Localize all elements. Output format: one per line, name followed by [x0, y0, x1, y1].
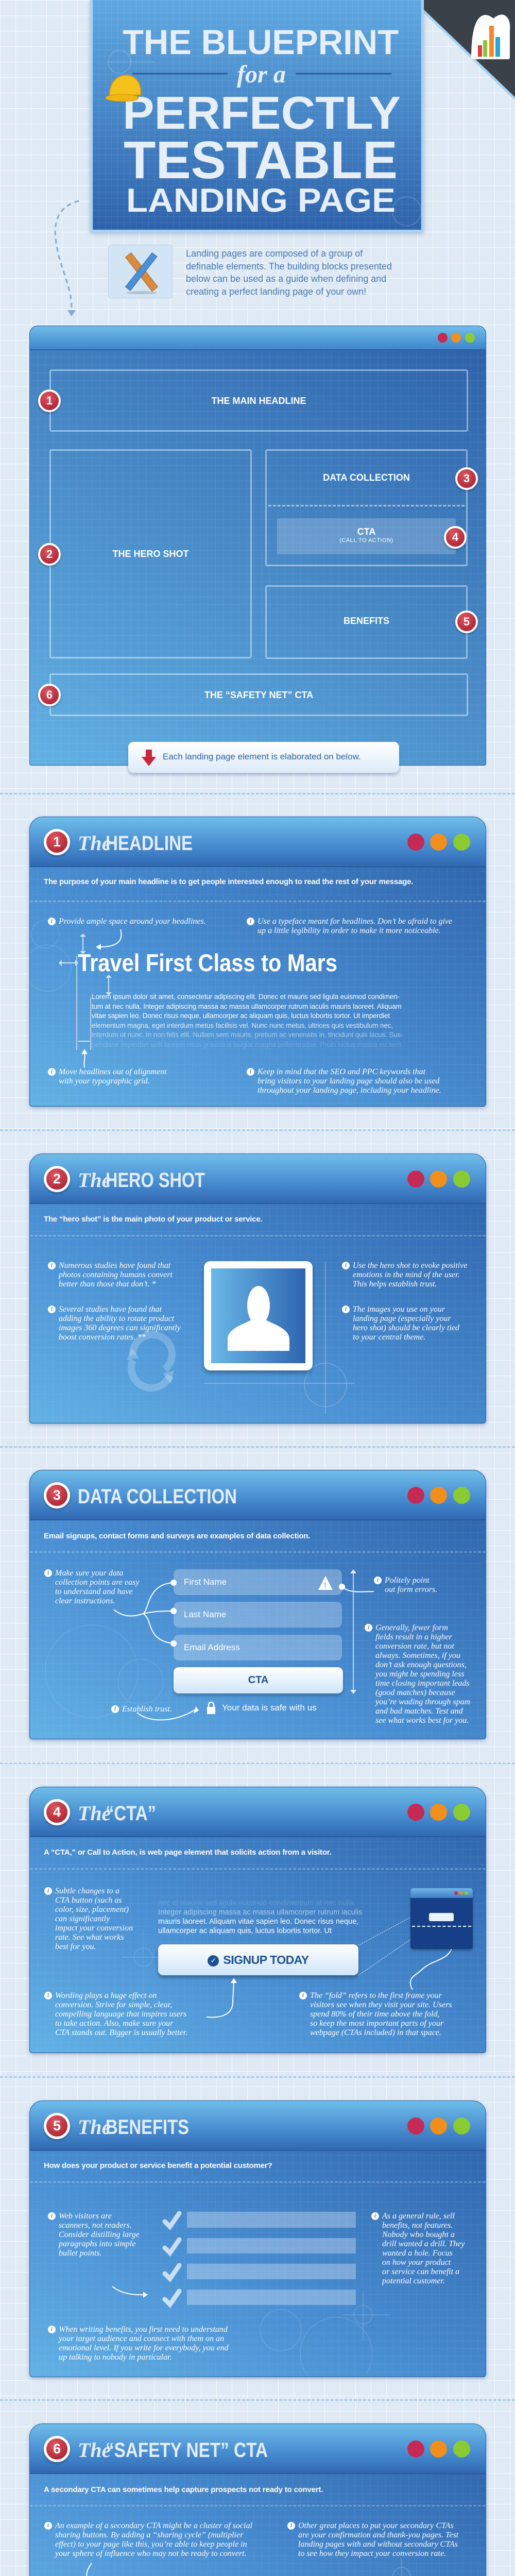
lorem above CTA: nec et mauris sed ligula euismod condimentum at nec nulla. [158, 1899, 356, 1907]
tip: alignment: with your typographic grid. [59, 1077, 150, 1086]
tip: easy to understand: to understand and have [55, 1587, 133, 1596]
button: signup today [158, 1944, 358, 1975]
tip: typeface: up a little legibility in order to make it more noticeable. [258, 926, 441, 935]
connectors [45, 1569, 374, 1721]
tip: positive emotions: emotions in the mind of the user. [353, 1270, 460, 1279]
form fields: First Name [184, 1577, 227, 1587]
header: CTA: The [78, 1802, 111, 1825]
intro text: The “hero shot” is the main photo of your product or service. [44, 1215, 263, 1224]
tip: keywords: bring visitors to your landing page should also be used [258, 1077, 439, 1086]
tip: rotate images: Several studies have found that [59, 1305, 162, 1314]
header: benefits: BENEFITS [106, 2116, 189, 2139]
tip: the fold [299, 1991, 452, 2037]
tip: benefits not features: or service can benefit a [382, 2267, 459, 2276]
guides and arrows [123, 1917, 452, 2018]
lorem body text: tum at nec nulla. Integer adipiscing massa ac massa ullamcorper rutrum iaculis mauris laoreet. Aliquam [92, 1003, 401, 1010]
intro text: below can be used as a guide when defining and [186, 274, 386, 284]
blueprint browser overview [29, 326, 486, 766]
header: headline: HEADLINE [106, 832, 193, 855]
tip: alignment: Move headlines out of alignment [59, 1067, 167, 1076]
header: hero shot: HERO SHOT [106, 1169, 205, 1192]
header: hero shot: The [78, 1168, 111, 1192]
icon: hard hat [105, 75, 141, 102]
tip: audience: your target audience and connect with them on an [59, 2334, 224, 2343]
lorem above CTA: ullamcorper ac aliquam quis, luctus lobortis tortor. Ut [158, 1927, 332, 1935]
tip: alignment: i [51, 1069, 53, 1075]
tip: wording [44, 1991, 187, 2037]
tip: easy to understand: clear instructions. [55, 1597, 115, 1605]
tip: humans convert: better than those that don’t. * [59, 1280, 156, 1289]
icon: pencil and ruler [108, 245, 173, 298]
tip: benefits not features: wanted a hole. Focus [382, 2249, 453, 2258]
tip: social cluster: effect) to your page like this, you’re able to keep people in [55, 2540, 247, 2549]
tip: wording: CTA stands out. Bigger is usually better. [55, 2028, 187, 2037]
tip: positive emotions: Use the hero shot to evoke positive [353, 1261, 467, 1270]
intro text: creating a perfect landing page of your own! [186, 286, 366, 297]
tip: fewer fields: and bad matches. Test and [375, 1707, 463, 1716]
tip: alignment [48, 1067, 167, 1086]
number badges: 2 [46, 548, 53, 561]
lorem above CTA: Integer adipiscing massa ac massa ullamcorper rutrum iaculis [158, 1908, 363, 1917]
tip: fewer fields: you’re wading through spam [375, 1698, 470, 1706]
box: data collection [265, 449, 468, 566]
tip: fewer fields: i [368, 1624, 369, 1631]
guides and rotate icon [127, 1262, 355, 1413]
hero frame with person [204, 1261, 313, 1370]
tip: keywords: Keep in mind that the SEO and PPC keywords that [258, 1067, 425, 1076]
header: headline: 1 [53, 834, 61, 850]
button: signup today: ✓ [211, 1957, 216, 1965]
header: CTA [30, 1787, 486, 1837]
tip: central theme: landing page (especially your [353, 1314, 451, 1323]
tip: establish trust: i [114, 1706, 116, 1712]
tip: keywords: i [250, 1069, 251, 1075]
tip: fewer fields: you might be spending less [375, 1670, 464, 1679]
form fields: Last Name [184, 1609, 226, 1619]
tip: easy to understand [44, 1569, 139, 1605]
button: signup today: SIGNUP TODAY [223, 1953, 309, 1967]
tip: scanners: i [51, 2213, 53, 2219]
intro text: The purpose of your main headline is to get people interested enough to read the rest of your message. [44, 877, 413, 886]
tip: typeface: Use a typeface meant for headlines. Don’t be afraid to give [258, 917, 452, 926]
guides and measure [30, 2558, 487, 2576]
tip: fewer fields: conversion rate, but not [375, 1642, 454, 1651]
tip: humans convert: photos containing humans convert [59, 1270, 173, 1279]
tip: benefits not features: As a general rule, sell [382, 2212, 455, 2221]
panel: 6 safety net CTA [29, 2424, 486, 2576]
header: benefits: 5 [53, 2118, 61, 2133]
tip: social cluster: i [47, 2522, 49, 2529]
tip: scanners: Web visitors are [59, 2212, 112, 2221]
tip: benefits not features: drill wanted a drill. They [382, 2240, 465, 2248]
header: safety net: The [78, 2438, 111, 2462]
tip: central theme: to your central theme. [353, 1333, 425, 1342]
tip: benefits not features [371, 2212, 465, 2285]
tip: form errors: out form errors. [385, 1585, 437, 1594]
tip: thank-you pages [287, 2521, 458, 2558]
tip: benefits not features: on how your product [382, 2258, 451, 2267]
lorem body text: vitae sapien leo. Donec risus neque, ullamcorper ac aliquam quis, luctus lobortis tortor. Ut imperdiet [92, 1012, 390, 1020]
tip: fewer fields: Generally, fewer form [375, 1623, 448, 1632]
lock note [207, 1701, 317, 1714]
tip: form errors: i [377, 1577, 379, 1583]
tip: easy to understand: collection points are easy [55, 1578, 139, 1587]
box: data collection: CTA [357, 527, 375, 537]
tip: rotate images: i [51, 1306, 53, 1312]
tip: establish trust: Establish trust. [122, 1705, 172, 1714]
tip: wording: compelling language that inspires users [55, 2010, 186, 2019]
tip: benefits not features: Nobody who bought a [382, 2230, 455, 2239]
box: benefits: BENEFITS [344, 616, 389, 626]
tip: typeface [247, 917, 452, 935]
tip: subtle changes: can significantly [55, 1914, 110, 1923]
box: benefits [265, 585, 468, 659]
header: data collection: DATA COLLECTION [78, 1485, 237, 1508]
tip: rotate images [48, 1305, 181, 1342]
title block: THE BLUEPRINT [123, 23, 399, 62]
tip: the fold: so keep the most important parts of your [310, 2019, 443, 2028]
lorem body text: Lorem ipsum dolor sit amet, consectetur adipiscing elit. Donec et mauris sed ligula euismod condimen- [92, 993, 400, 1001]
tip: subtle changes [44, 1887, 133, 1951]
tip: humans convert: Numerous studies have found that [59, 1261, 170, 1270]
tip: fewer fields: don’t ask enough questions, [375, 1660, 467, 1669]
tip: audience: When writing benefits, you first need to understand [59, 2325, 228, 2334]
tip: the fold: webpage (CTAs included) in that space. [310, 2028, 441, 2037]
number badges: 4 [452, 531, 458, 544]
header: data collection: 3 [53, 1487, 61, 1503]
tip: subtle changes: Subtle changes to a [55, 1887, 119, 1895]
icon: mini browser fold [410, 1888, 473, 1949]
tip: ample space: Provide ample space around your headlines. [59, 917, 206, 926]
tip: social cluster: sharing buttons. By adding a “sharing cycle” (multiplier [55, 2531, 243, 2539]
tip: rotate images: images 360 degrees can significantly [59, 1324, 181, 1332]
tip: keywords: throughout your landing page, including your headline. [258, 1086, 441, 1095]
callout: elaborated below [128, 742, 399, 773]
tip: central theme [342, 1305, 459, 1342]
tip: rotate images: adding the ability to rotate product [59, 1314, 174, 1323]
tip: benefits not features: potential customer. [382, 2277, 445, 2285]
lorem body text: pendisse imperdiet velit laoreet risus gravida a feugiat magna pellentesque. Proin luctus massa eu sem [92, 1041, 402, 1048]
panel: 2 hero shot [29, 1154, 486, 1423]
box: safety net [49, 673, 468, 716]
tip: subtle changes: rate. See what works [55, 1933, 124, 1942]
tip: typeface: i [250, 918, 251, 924]
box: main headline [49, 369, 468, 432]
tip: wording: conversion. Strive for simple, clear, [55, 2001, 172, 2009]
intro text: How does your product or service benefit a potential customer? [44, 2161, 272, 2170]
tip: central theme: hero shot) should be clearly tied [353, 1324, 459, 1332]
tip: thank-you pages: are your confirmation and thank-you pages. Test [298, 2531, 458, 2539]
tip: scanners [48, 2212, 140, 2258]
tip: positive emotions [342, 1261, 468, 1289]
intro text: definable elements. The building blocks presented [186, 261, 392, 271]
lock note: Your data is safe with us [222, 1703, 317, 1713]
tip: subtle changes: color, size, placement) [55, 1905, 129, 1914]
tip: form errors [374, 1576, 437, 1594]
panel: 5 benefits [29, 2100, 486, 2377]
tip: wording: Wording plays a huge effect on [55, 1991, 157, 2000]
diagram: headline guides: Travel First Class to Mars [78, 949, 337, 976]
lorem above CTA: mauris laoreet. Aliquam vitae sapien leo. Donec risus neque, [158, 1918, 358, 1926]
panel: 3 data collection [29, 1470, 486, 1739]
intro text: Landing pages are composed of a group of [186, 248, 363, 259]
header: safety net: 6 [53, 2441, 61, 2456]
lorem above CTA [158, 1899, 363, 1935]
connectors: ! [324, 1581, 327, 1590]
tip: fewer fields: always. Sometimes, if you [375, 1651, 460, 1660]
tip: scanners: scanners, not readers. [59, 2221, 132, 2230]
tip: central theme: i [345, 1306, 347, 1312]
tip: fewer fields: (good matches) because [375, 1688, 455, 1697]
number badges [37, 389, 479, 709]
tip: audience: emotional level. If you write for everybody, you end [59, 2344, 229, 2352]
box: data collection: DATA COLLECTION [323, 472, 410, 483]
tip: subtle changes: best for you. [55, 1942, 96, 1951]
title block: TESTABLE [124, 130, 398, 190]
header: hero shot: 2 [53, 1171, 61, 1187]
header: CTA: “CTA” [106, 1802, 156, 1825]
number badges: 1 [46, 394, 53, 407]
tip: social cluster: your sphere of influence who may not be ready to convert. [55, 2549, 247, 2558]
tip: fewer fields: time closing important leads [375, 1679, 470, 1688]
number badges: 3 [464, 472, 470, 485]
box: hero shot [49, 449, 252, 658]
number badges: 6 [46, 688, 53, 701]
box: hero shot: THE HERO SHOT [112, 549, 188, 559]
tip: audience [48, 2325, 229, 2362]
tip: audience: i [51, 2326, 53, 2332]
form fields: Email Address [184, 1642, 240, 1652]
tip: easy to understand: i [47, 1570, 49, 1576]
header: safety net [30, 2424, 486, 2474]
corner logo badge [424, 0, 515, 100]
box: data collection: (CALL TO ACTION) [339, 537, 393, 544]
tip: scanners: bullet points. [59, 2249, 102, 2258]
tip: central theme: The images you use on your [353, 1305, 445, 1314]
tip: wording: to take action. Also, make sure your [55, 2019, 173, 2028]
tip: wording: i [47, 1992, 49, 1998]
tip: subtle changes: i [47, 1888, 49, 1894]
lorem body text: interdum ut nunc. In non felis elit. Nullam sem mauris, pretium ac venenatis in, tincidunt quis lacus. Sus- [92, 1031, 403, 1039]
tip: social cluster [44, 2521, 252, 2558]
tip: scanners: paragraphs into simple [59, 2240, 135, 2248]
panel: 4 the CTA [29, 1787, 486, 2053]
lorem body text: elementum magna, eget interdum metus facilisis vel. Nunc nunc metus, ultrices quis vestibulum nec, [92, 1022, 393, 1029]
tip: benefits not features: i [374, 2213, 376, 2219]
tip: thank-you pages: to see how they impact your conversion rate. [298, 2549, 446, 2558]
tip: positive emotions: This helps establish trust. [353, 1280, 437, 1289]
arrow: dashed intro arrow [55, 200, 79, 316]
tip: scanners: Consider distilling large [59, 2230, 140, 2239]
check list [112, 2211, 390, 2374]
header: headline [30, 817, 486, 867]
tip: fewer fields: fields result in a higher [375, 1633, 452, 1641]
tip: easy to understand: Make sure your data [55, 1569, 123, 1578]
title block [90, 0, 424, 232]
tip: subtle changes: impact your conversion [55, 1924, 133, 1933]
tip: ample space: i [51, 918, 53, 924]
title block: LANDING PAGE [126, 181, 396, 219]
tip: the fold: i [302, 1992, 304, 1998]
tip: subtle changes: CTA button (such as [55, 1896, 122, 1905]
number badges: 5 [464, 615, 470, 628]
form fields: CTA [248, 1674, 268, 1686]
header: benefits: The [78, 2115, 111, 2139]
tip: social cluster: An example of a secondary CTA might be a cluster of social [55, 2521, 252, 2530]
header: hero shot [30, 1154, 486, 1204]
tip: the fold: The “fold” refers to the first frame your [310, 1991, 442, 2000]
diagram: headline guides [30, 920, 337, 1067]
tip: keywords [247, 1067, 441, 1095]
tip: fewer fields: see what works best for you. [375, 1716, 469, 1725]
tip: the fold: spend 80% of their time above the fold, [310, 2010, 440, 2019]
intro text: A “CTA,” or Call to Action, is web page element that solicits action from a visitor. [44, 1848, 332, 1857]
box: main headline: THE MAIN HEADLINE [211, 396, 306, 406]
tip: rotate images: boost conversion rates. ** [59, 1333, 146, 1342]
panel: 1 the headline [29, 817, 486, 1107]
header: headline: The [78, 832, 111, 855]
title block: PERFECTLY [123, 88, 401, 139]
tip: benefits not features: benefits, not features. [382, 2221, 453, 2230]
title block: for a [237, 61, 286, 88]
tip: audience: up talking to nobody in particular. [59, 2353, 172, 2362]
form fields [172, 1569, 345, 1697]
tip: thank-you pages: landing pages with and without secondary CTAs [298, 2540, 458, 2549]
tip: fewer fields [365, 1623, 470, 1725]
tip: humans convert [48, 1261, 173, 1289]
tip: the fold: visitors see when they visit your site. Users [310, 2001, 452, 2009]
intro text: Email signups, contact forms and surveys are examples of data collection. [44, 1532, 310, 1540]
intro text [186, 248, 392, 297]
callout: elaborated below: Each landing page element is elaborated on below. [163, 752, 361, 761]
header: data collection [30, 1470, 486, 1520]
tip: humans convert: i [51, 1262, 53, 1268]
tip: positive emotions: i [345, 1262, 347, 1268]
box: safety net: THE “SAFETY NET” CTA [204, 690, 313, 700]
intro text: A secondary CTA can sometimes help capture prospects not ready to convert. [44, 2485, 323, 2494]
header: benefits [30, 2101, 486, 2151]
tip: form errors: Politely point [385, 1576, 430, 1585]
lorem body text [92, 993, 403, 1048]
tip: thank-you pages: i [290, 2522, 292, 2529]
tip: thank-you pages: Other great places to put your secondary CTAs [298, 2521, 454, 2530]
header: CTA: 4 [53, 1804, 61, 1820]
